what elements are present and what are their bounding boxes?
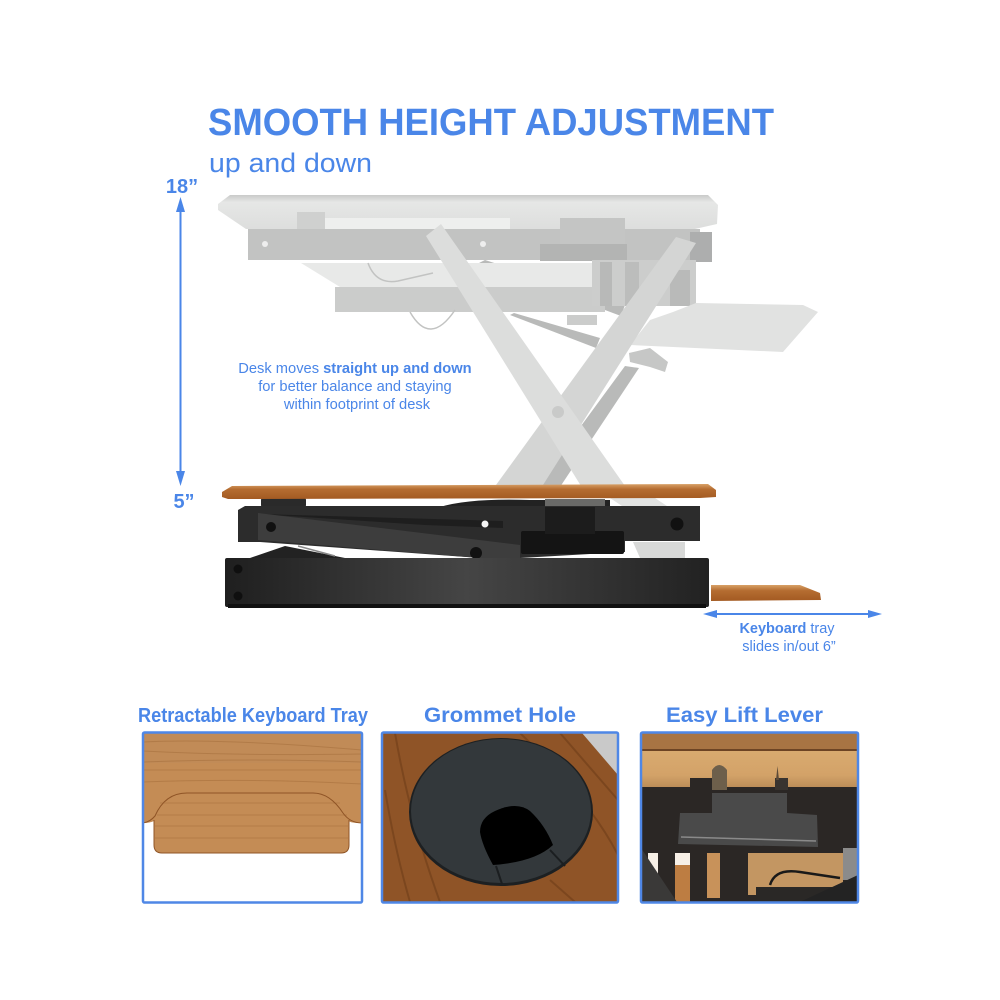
panel frame xyxy=(382,732,618,902)
panel: easy lift lever xyxy=(641,704,858,902)
keyboard tray caption: Keyboard tray xyxy=(739,621,835,637)
desk: lowered position xyxy=(222,484,821,608)
wood desktop xyxy=(222,484,716,499)
height label: 18 inches: 18” xyxy=(166,176,198,198)
panel: retractable keyboard tray xyxy=(138,705,369,902)
description text: Desk moves straight up and down xyxy=(238,361,472,377)
upper frame xyxy=(238,506,700,559)
arrow: vertical height range xyxy=(176,197,185,486)
ghost scissor arm right xyxy=(496,237,696,485)
ghost feet xyxy=(610,498,670,508)
ghost work surface xyxy=(218,195,718,231)
panel frame xyxy=(641,732,858,902)
ghost lever xyxy=(629,348,668,372)
panel frame xyxy=(143,732,362,902)
ghost rear scissor arm xyxy=(479,260,639,490)
ghost desk: raised position xyxy=(218,195,818,558)
mounting pad xyxy=(261,498,306,507)
base box xyxy=(225,558,709,608)
description text: for better balance and staying xyxy=(258,379,452,395)
subtitle: up and down xyxy=(209,148,372,178)
title: SMOOTH HEIGHT ADJUSTMENT xyxy=(208,102,774,144)
ghost pivot xyxy=(552,406,564,418)
ghost scissor arm left xyxy=(426,224,625,486)
ghost under rail xyxy=(248,212,712,262)
panel heading: Easy Lift Lever xyxy=(666,704,823,727)
panel: grommet hole xyxy=(382,704,618,902)
ghost keyboard tray xyxy=(630,303,818,352)
photo: lever xyxy=(641,733,858,902)
keyboard tray xyxy=(711,585,821,601)
cable and hardware xyxy=(440,499,610,508)
ghost lower plate xyxy=(301,260,696,329)
panel heading: Retractable Keyboard Tray xyxy=(138,705,369,727)
height label: 5 inches: 5” xyxy=(173,491,195,513)
arrow: keyboard tray travel xyxy=(703,610,882,618)
photo: wood tray xyxy=(144,734,361,854)
panel heading: Grommet Hole xyxy=(424,704,576,727)
keyboard tray caption: slides in/out 6” xyxy=(742,639,836,655)
photo: grommet xyxy=(382,733,618,902)
description text: within footprint of desk xyxy=(283,397,431,413)
